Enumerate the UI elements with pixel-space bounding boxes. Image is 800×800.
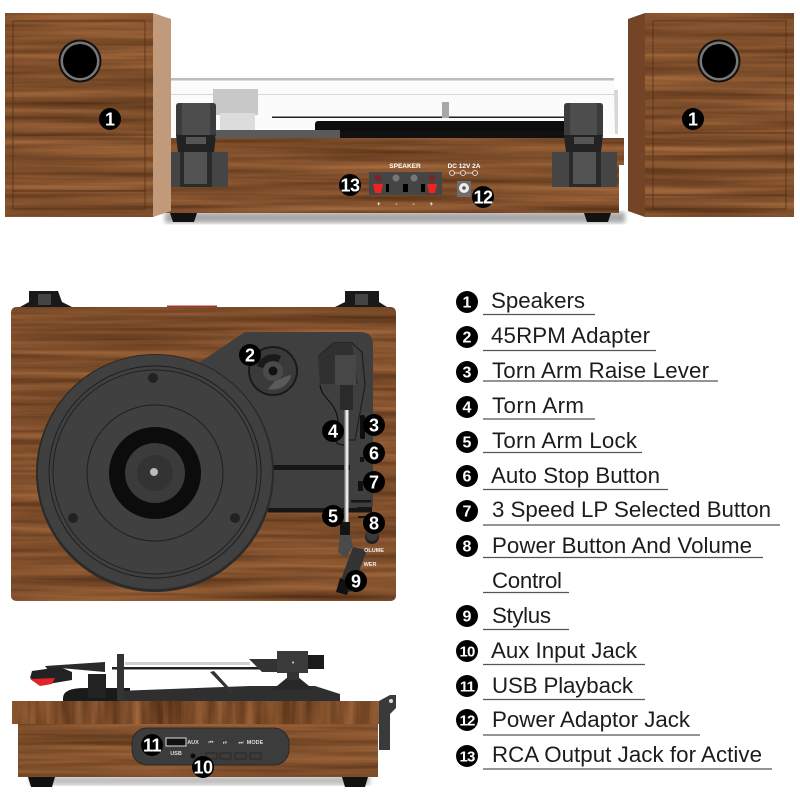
- front wood top layer: [12, 701, 379, 724]
- item 8: 8: [463, 538, 472, 556]
- badge 11: 11: [143, 736, 162, 756]
- item 3: Torn Arm Raise Lever: [492, 358, 710, 383]
- item 7: 3 Speed LP Selected Button: [492, 497, 771, 522]
- item 13: 13: [459, 748, 475, 766]
- deck plate: [118, 686, 340, 701]
- control panel: ⏯: [223, 740, 227, 746]
- plate slots: [268, 465, 372, 518]
- item 12: Power Adaptor Jack: [492, 707, 691, 732]
- left speaker details: [13, 21, 153, 209]
- wood top: [11, 307, 396, 601]
- item 4: Torn Arm: [492, 393, 584, 418]
- left speaker side: [153, 13, 171, 217]
- item 1: [456, 288, 595, 314]
- badge 7: 7: [369, 472, 379, 492]
- tonearm: [318, 343, 367, 595]
- control plate: [200, 332, 373, 512]
- tonearm side: [30, 651, 324, 700]
- badge 1 left: 1: [105, 110, 115, 130]
- badge 9: 9: [351, 572, 361, 592]
- control panel: ⏭: [239, 740, 244, 746]
- badge 4: [322, 420, 344, 442]
- control panel: ⏮: [209, 740, 214, 746]
- panel: right speaker: [628, 13, 794, 217]
- item 12: 12: [459, 712, 475, 730]
- control panel: USB: [170, 751, 182, 757]
- speaker label: SPEAKER: [389, 163, 421, 170]
- right speaker details: [645, 21, 794, 209]
- badge 10: 10: [193, 758, 213, 778]
- item 4: 4: [463, 400, 472, 416]
- speaker terminals: [369, 172, 442, 195]
- item 1: Speakers: [491, 288, 585, 313]
- control panel: MODE: [247, 740, 264, 746]
- right foot: [584, 213, 611, 222]
- legend: [456, 288, 780, 769]
- top hinges: [20, 291, 387, 307]
- panel: top view: [11, 291, 396, 601]
- badge 2: [239, 344, 261, 366]
- right woofer: [698, 40, 740, 82]
- left foot: [170, 213, 197, 222]
- hinge side: [379, 695, 396, 750]
- badge 13: 13: [340, 176, 360, 196]
- platter side: [63, 688, 130, 701]
- item 4: [456, 393, 595, 419]
- right speaker side: [628, 13, 645, 217]
- badge 5: 5: [328, 506, 338, 526]
- DC polarity symbol: [450, 170, 478, 176]
- item 9: 9: [463, 608, 472, 626]
- badge 6: 6: [369, 444, 379, 464]
- shadow under rear view: [165, 212, 625, 223]
- polarity marks: + - - +: [377, 202, 433, 208]
- badge 12: 12: [473, 188, 493, 208]
- turntable rear wood body: [155, 138, 624, 213]
- item 8: Control: [492, 568, 562, 593]
- raise lever: [360, 415, 365, 439]
- badge 6: [363, 442, 385, 464]
- badge 8: [363, 512, 385, 534]
- item 2: 45RPM Adapter: [491, 323, 651, 348]
- volume label: OLUME: [364, 548, 384, 554]
- foot right: [342, 777, 368, 787]
- power jack: [457, 181, 471, 197]
- badge 8: 8: [369, 514, 379, 534]
- badge 3: 3: [369, 416, 379, 436]
- volume knob: [365, 529, 379, 544]
- item 8: Power Button And Volume: [492, 533, 752, 558]
- item 3: 3: [463, 364, 472, 382]
- speed switch: [358, 481, 363, 491]
- item 2: 2: [463, 330, 472, 346]
- item 6: 6: [463, 468, 472, 486]
- 45RPM adapter: [248, 346, 298, 396]
- item 13: RCA Output Jack for Active: [492, 742, 762, 767]
- auto stop switch: [360, 457, 364, 462]
- badge 3: [363, 414, 385, 436]
- item 9: [456, 603, 569, 630]
- front wood body: [18, 724, 378, 777]
- item 8: [456, 533, 763, 593]
- shadow under front view: [30, 776, 370, 785]
- item 9: Stylus: [492, 603, 551, 628]
- control panel: AUX: [187, 740, 199, 746]
- badge 9: [345, 570, 367, 592]
- item 5: Torn Arm Lock: [492, 428, 638, 453]
- item 11: 11: [460, 678, 475, 696]
- DC label: DC 12V 2A: [448, 163, 481, 170]
- power label: WER: [364, 562, 376, 568]
- badge 4: 4: [328, 422, 338, 442]
- right hinge: [552, 103, 617, 187]
- item 6: Auto Stop Button: [491, 463, 660, 488]
- item 1: 1: [463, 294, 472, 312]
- item 11: USB Playback: [492, 673, 634, 698]
- badge 7: [363, 471, 385, 493]
- panel: left speaker: [5, 13, 171, 217]
- badge 1 right: 1: [688, 110, 698, 130]
- item 10: Aux Input Jack: [491, 638, 638, 663]
- panel: rear view: [155, 78, 625, 223]
- badge 1 right: [682, 108, 704, 130]
- control panel: [132, 728, 289, 765]
- dust cover: [162, 78, 618, 134]
- foot left: [28, 777, 55, 787]
- panel: front view: [12, 651, 396, 787]
- left speaker front: [5, 13, 153, 217]
- platter seen from rear: [216, 121, 570, 138]
- badge 2: 2: [245, 346, 255, 366]
- right speaker front: [645, 13, 794, 217]
- badge 1 left: [99, 108, 121, 130]
- platter: [36, 354, 274, 592]
- left hinge: [163, 103, 228, 187]
- item 5: 5: [463, 434, 472, 452]
- left woofer: [58, 40, 102, 82]
- item 10: 10: [459, 644, 475, 660]
- item 7: 7: [463, 504, 472, 520]
- badge 5: [322, 505, 344, 527]
